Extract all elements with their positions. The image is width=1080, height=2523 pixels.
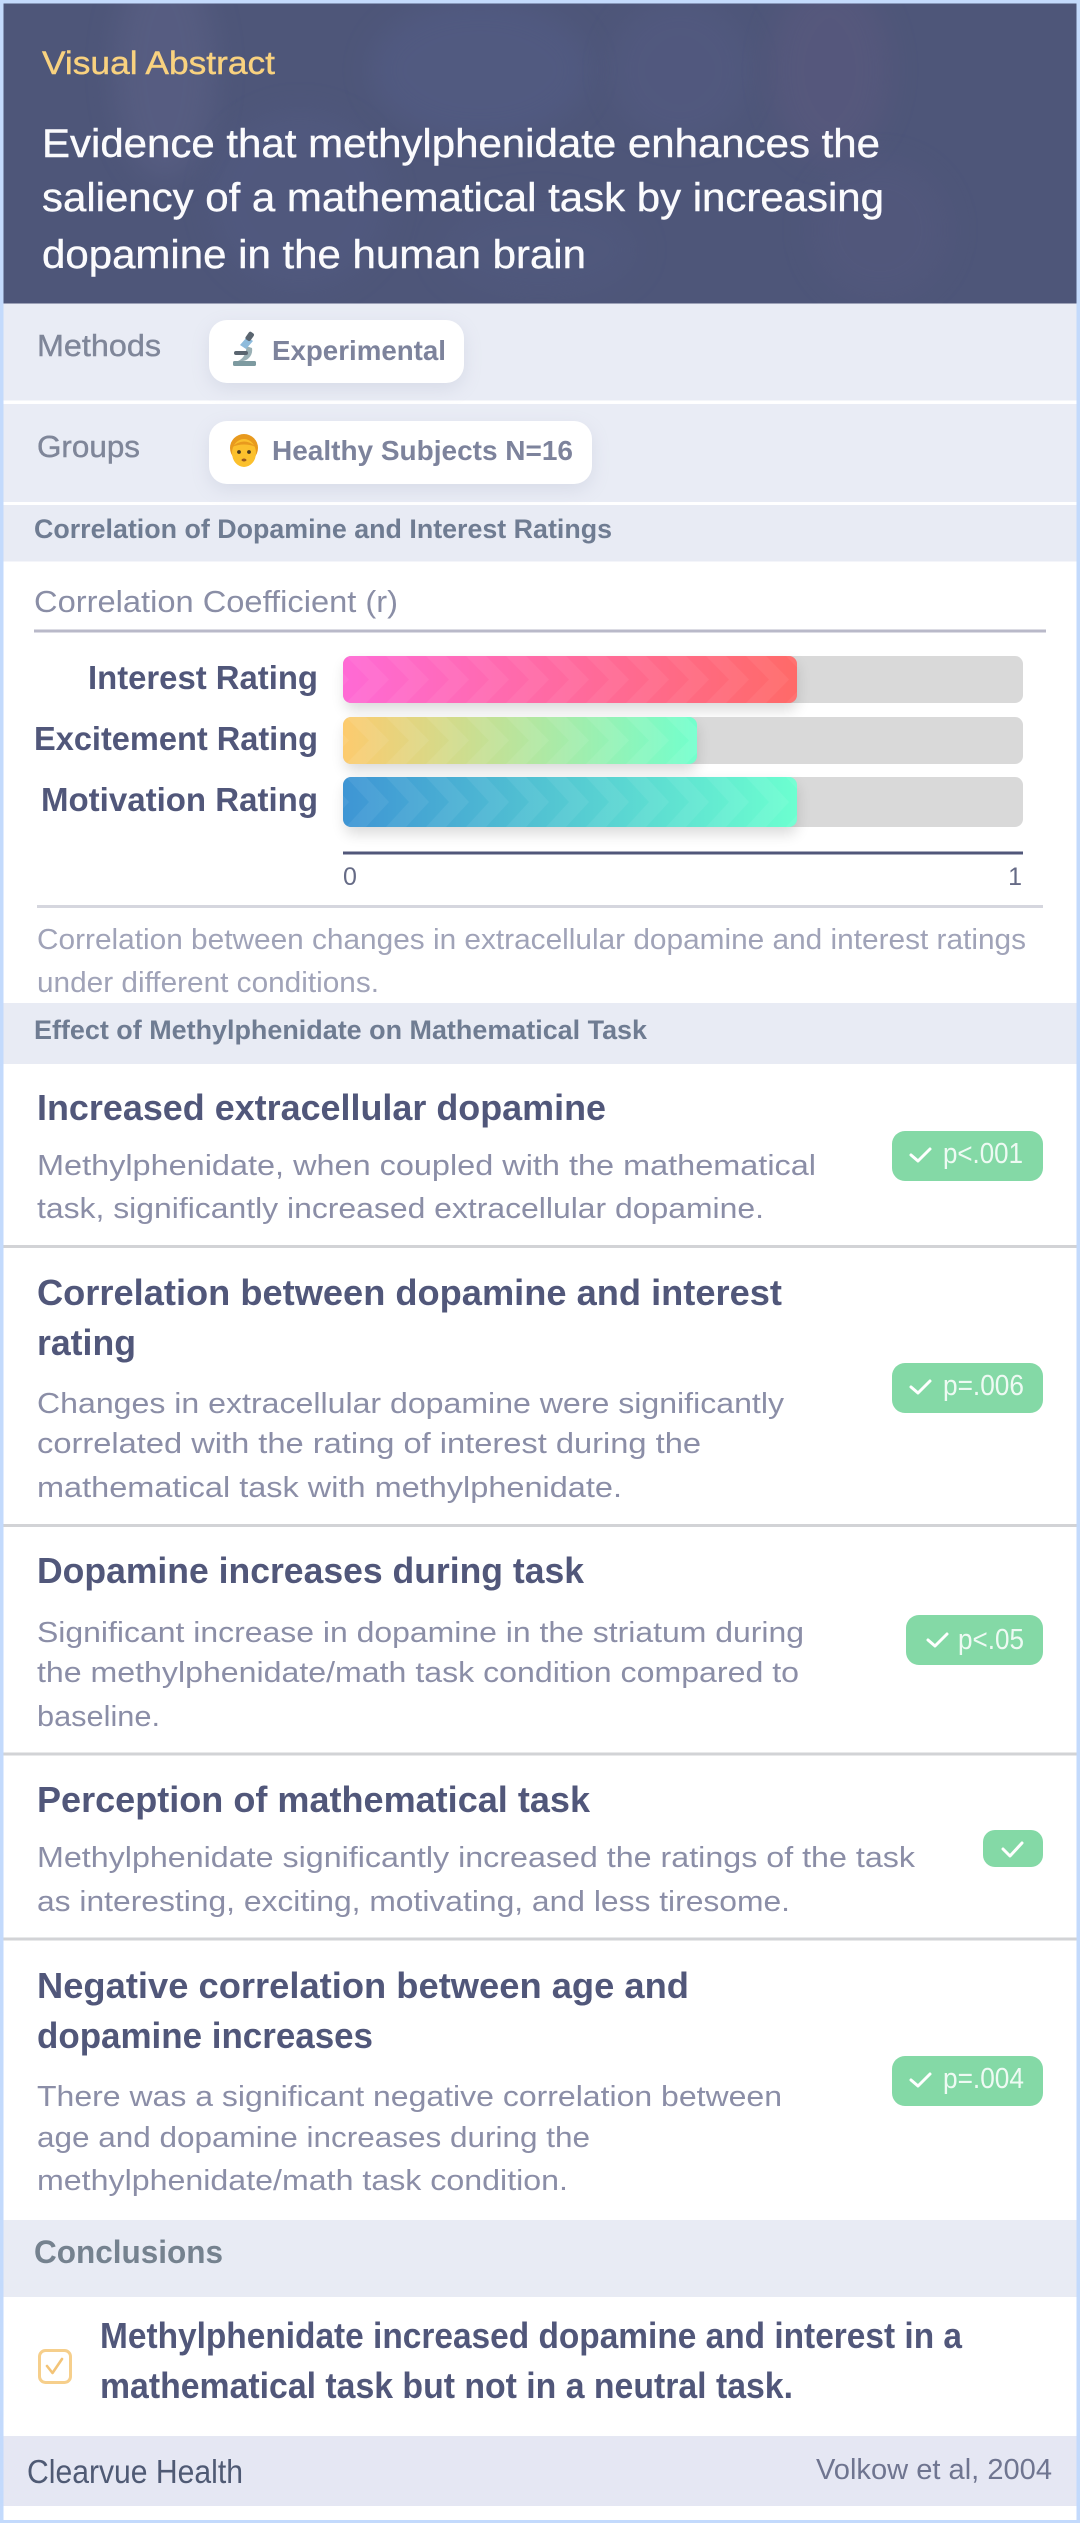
title: saliency of a mathematical task by increasing [42,176,884,220]
header panel [4,0,1076,304]
finding: dopamine increases during task: Dopamine increases during task [37,1550,585,1591]
label: Visual Abstract: Visual Abstract [42,45,275,81]
title: Evidence that methylphenidate enhances the [42,122,880,166]
pill: Healthy Subjects [209,421,592,484]
finding: perception of mathematical task: Perception of mathematical task [37,1779,591,1820]
axis: 0 [343,863,357,891]
bar: Motivation Rating: Motivation Rating [41,781,318,818]
pill: Experimental [209,320,464,383]
finding: correlation between dopamine and interest: Changes in extracellular dopamine were significantly [37,1388,785,1420]
finding: negative correlation: age and dopamine increases during the [37,2122,590,2154]
badge: p=.006 [892,1363,1043,1413]
title [42,122,884,277]
chart caption: Correlation between changes in extracellular dopamine and interest ratings [37,924,1026,956]
finding: negative correlation: Negative correlation between age and [37,1965,689,2006]
footer [4,2436,1076,2506]
groups label: Groups [37,429,140,464]
bar: Motivation Rating [41,777,1023,834]
finding: dopamine increases during task: Significant increase in dopamine in the striatum during [37,1617,804,1649]
title: dopamine in the human brain [42,233,586,277]
finding: negative correlation: dopamine increases [37,2015,373,2056]
conclusion [40,2315,963,2406]
bar: Interest Rating [88,656,1023,710]
conclusion text: Methylphenidate increased dopamine and interest in a [100,2315,963,2356]
finding: correlation between dopamine and interest [37,1272,1043,1504]
pill text: Healthy Subjects N=16 [272,435,573,466]
finding: negative correlation: methylphenidate/math task condition. [37,2165,568,2197]
badge: check only [983,1830,1043,1867]
conclusion: mathematical task but not in a neutral task. [100,2365,793,2406]
section heading: effect: Effect of Methylphenidate on Mathematical Task [34,1015,648,1045]
finding: negative correlation: There was a significant negative correlation between [37,2081,782,2113]
pill shadow [209,427,592,490]
finding: increased extracellular dopamine: Methylphenidate, when coupled with the mathematical [37,1150,816,1182]
icon: person [230,434,258,467]
methods label: Methods [37,328,161,363]
bar: Excitement Rating: Excitement Rating [34,720,318,757]
finding: perception of mathematical task [37,1779,1043,1918]
finding: dopamine increases during task [37,1550,1043,1733]
badge: p=.006: p=.006 [943,1370,1024,1402]
finding: increased extracellular dopamine: Increased extracellular dopamine [37,1087,606,1128]
icon: microscope [233,331,256,366]
bar chart panel [34,584,1046,999]
finding: correlation between dopamine and interest: Correlation between dopamine and interest [37,1272,782,1313]
icon: checkbox [40,2350,70,2382]
finding: perception of mathematical task: as interesting, exciting, motivating, and less tiresome. [37,1886,790,1918]
section heading: conclusions [4,2220,1076,2297]
section heading: correlation: Correlation of Dopamine and Interest Ratings [34,514,612,544]
section heading: effect [4,1003,1076,1064]
bar: Excitement Rating [34,717,1023,771]
section heading: correlation [4,505,1076,562]
badge: p<.05: p<.05 [958,1624,1024,1656]
pill text: Experimental [272,335,446,366]
axis [343,852,1023,891]
badge: p<.001 [892,1131,1043,1181]
groups row [4,404,1076,502]
badge: p=.004: p=.004 [943,2063,1024,2095]
finding: correlation between dopamine and interest: correlated with the rating of interest during the [37,1428,701,1460]
brand: Clearvue Health [27,2453,243,2490]
finding: increased extracellular dopamine [37,1087,1043,1225]
finding: dopamine increases during task: baseline. [37,1701,160,1733]
citation: Volkow et al, 2004 [816,2454,1052,2486]
finding: correlation between dopamine and interest: rating [37,1322,136,1363]
badge: p<.001: p<.001 [943,1138,1023,1170]
badge: p=.004 [892,2056,1043,2106]
chart caption [37,924,1026,999]
finding: correlation between dopamine and interest: mathematical task with methylphenidate. [37,1472,622,1504]
chart caption: under different conditions. [37,967,379,999]
section heading: conclusions: Conclusions [34,2234,223,2270]
pill shadow [209,326,464,389]
finding: dopamine increases during task: the methylphenidate/math task condition compared to [37,1657,799,1689]
finding: increased extracellular dopamine: task, significantly increased extracellular dopamine. [37,1193,764,1225]
badge: p<.05 [906,1615,1043,1665]
finding: perception of mathematical task: Methylphenidate significantly increased the ratings of the task [37,1842,916,1874]
finding: negative correlation [37,1965,1043,2197]
axis: 1 [1008,863,1022,891]
chart title: Correlation Coefficient (r) [34,584,398,619]
methods row [4,304,1076,400]
header background texture [146,4,184,141]
bar: Interest Rating: Interest Rating [88,659,318,696]
